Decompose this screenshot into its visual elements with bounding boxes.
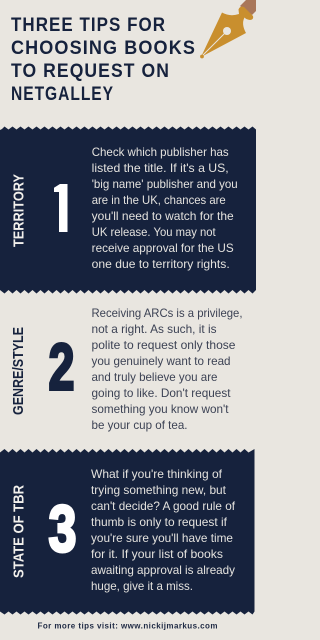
text block: genre/style: Receiving ARCs is a privilege, bbox=[92, 307, 242, 320]
text block: state of tbr: for it. If your list of books bbox=[91, 548, 223, 561]
text block: territory: listed the title. If it's a US, bbox=[92, 162, 229, 175]
number 2: 2 bbox=[48, 330, 74, 404]
text block: state of tbr: What if you're thinking of bbox=[91, 468, 223, 481]
text block: state of tbr bbox=[91, 468, 236, 593]
text block: state of tbr: awaiting approval is already bbox=[91, 564, 235, 577]
panel: genre/style bbox=[10, 307, 242, 432]
text block: territory: UK release. You may not bbox=[92, 226, 216, 239]
text block: genre/style: going to like. Don't request bbox=[92, 387, 231, 400]
text block: state of tbr: huge, give it a miss. bbox=[91, 580, 193, 593]
text block: state of tbr: thumb is only to request if bbox=[91, 516, 228, 529]
title: CHOOSING BOOKS bbox=[11, 37, 196, 59]
footer text: For more tips visit: www.nickijmarkus.com bbox=[38, 622, 218, 630]
text block: territory: receive approval for the US bbox=[92, 242, 234, 255]
title: THREE TIPS FOR bbox=[11, 14, 166, 36]
text block: genre/style: something you know won't bbox=[92, 403, 229, 416]
text block: genre/style: you genuinely want to read bbox=[92, 355, 231, 368]
text block: state of tbr: you're sure you'll have time bbox=[91, 532, 233, 545]
number 1: 1 bbox=[44, 171, 82, 245]
number 3: 3 bbox=[48, 492, 76, 566]
text block: state of tbr: can't decide? A good rule of bbox=[91, 500, 236, 513]
text block: state of tbr: trying something new, but bbox=[91, 484, 227, 497]
text block: territory: 'big name' publisher and you bbox=[92, 178, 238, 191]
panel: state of tbr bbox=[0, 449, 254, 614]
background bbox=[0, 0, 256, 640]
text block: territory: you'll need to watch for the bbox=[92, 210, 234, 223]
panel: territory bbox=[0, 126, 256, 294]
panel background: state of tbr bbox=[0, 449, 254, 614]
label: genre/style: GENRE/STYLE bbox=[10, 327, 27, 415]
text block: genre/style: be your cup of tea. bbox=[92, 419, 188, 432]
title: TO REQUEST ON bbox=[11, 60, 170, 82]
text block: territory: are in the UK, chances are bbox=[92, 194, 226, 207]
text block: territory bbox=[92, 146, 238, 271]
panel background: territory bbox=[0, 126, 256, 294]
text block: genre/style: and truly believe you are bbox=[92, 371, 218, 384]
icon: fountain pen nib bbox=[200, 0, 256, 58]
text block: genre/style: polite to request only those bbox=[92, 339, 236, 352]
text block: territory: Check which publisher has bbox=[92, 146, 229, 159]
title: NETGALLEY bbox=[11, 83, 114, 105]
text block: genre/style: not a right. As such, it is bbox=[92, 323, 217, 336]
title bbox=[11, 14, 196, 105]
text block: genre/style bbox=[92, 307, 242, 432]
label: state of tbr: STATE OF TBR bbox=[10, 485, 28, 578]
text block: territory: one due to territory rights. bbox=[92, 258, 230, 271]
label: territory: TERRITORY bbox=[10, 174, 28, 247]
